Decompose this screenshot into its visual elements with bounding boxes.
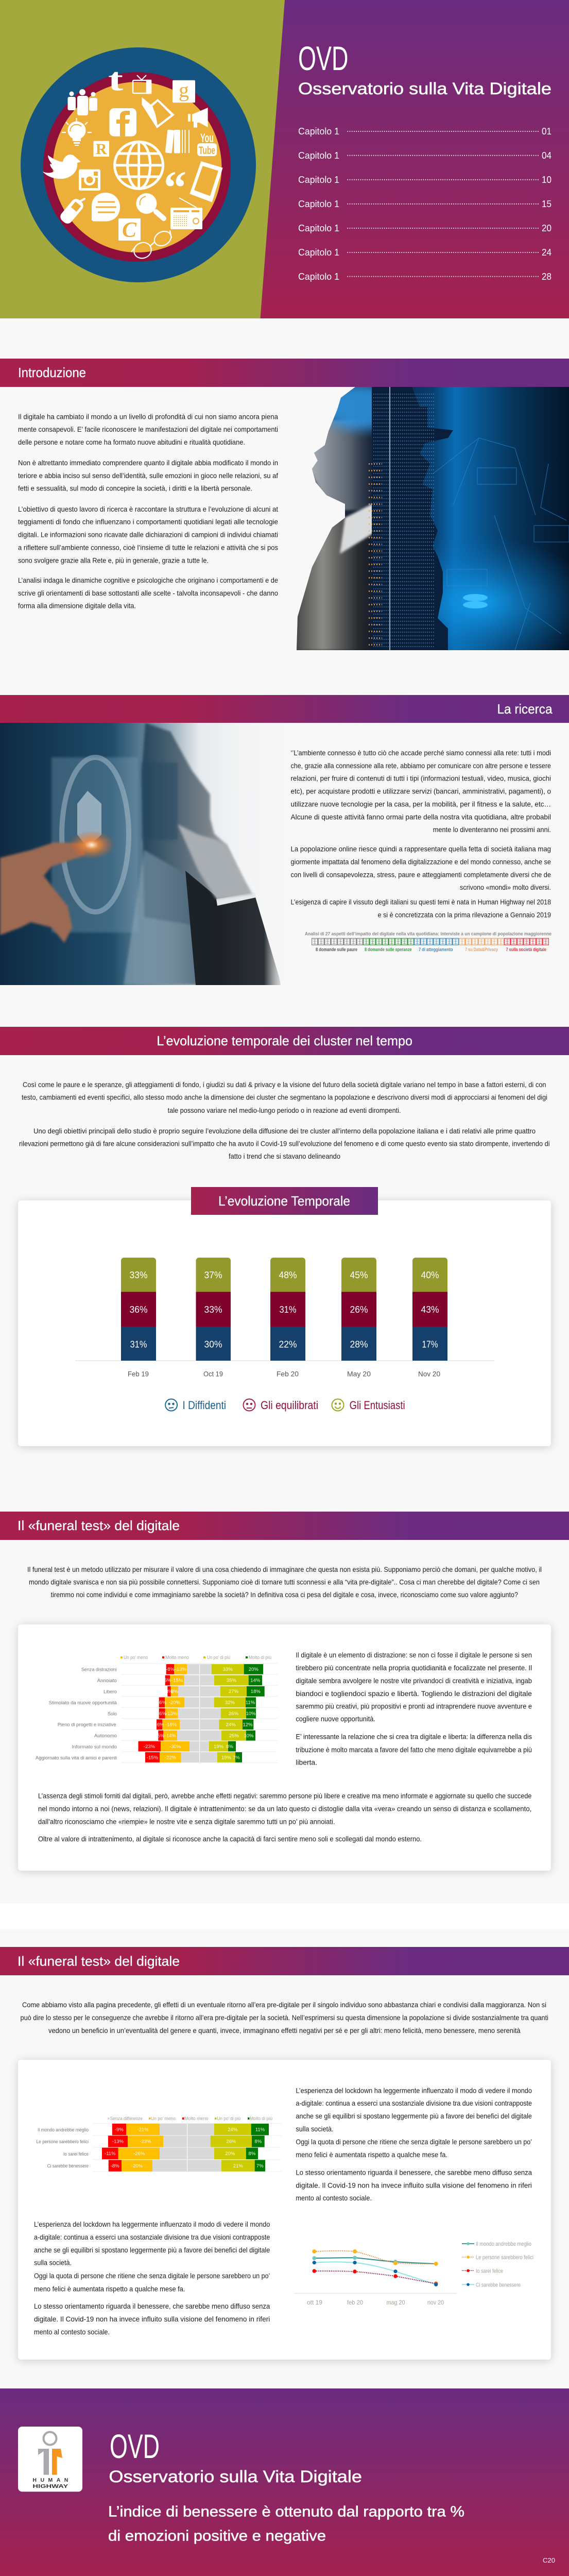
row: Le persone sarebbero felici: -23% (140, 2139, 151, 2144)
icon: enthusiast face (332, 1399, 344, 1411)
bar: Oct 19 (196, 1258, 231, 1378)
photo: man and city double exposure (297, 384, 569, 670)
row: Stimolato da nuove opportunità: Stimolato da nuove opportunità (49, 1700, 117, 1706)
table of contents: 20 (542, 223, 551, 233)
row: Ci sarebbe benessere: 21% (233, 2163, 243, 2169)
row: Solo: -13% (166, 1711, 178, 1717)
row: Le persone sarebbero felici: 8% (254, 2139, 262, 2144)
research text: etc), per acquistare prodotti e utilizzare servizi (bancari, amministrativi, pagamenti), o (290, 787, 551, 795)
row: Aggiornato sulla vita di amici e parenti: 7% (233, 1755, 240, 1761)
header bar (0, 695, 569, 723)
row: Stimolato da nuove opportunità: -6% (158, 1700, 166, 1705)
bar: Nov 20: 43% (421, 1304, 439, 1315)
series: Ci sarebbe benessere (313, 2261, 436, 2284)
right text: Lo stesso orientamento riguarda il benessere, che sarebbe meno diffuso senza (296, 2168, 532, 2177)
row: Stimolato da nuove opportunità: 11% (246, 1700, 255, 1705)
table of contents: Capitolo 1 (298, 150, 339, 161)
diverging bar chart (36, 2116, 281, 2172)
grid labels: 7 su Data&Privacy (465, 947, 498, 952)
row: Libero: 18% (251, 1689, 261, 1694)
row: Libero: 3% (166, 1689, 173, 1694)
row: Stimolato da nuove opportunità: 32% (225, 1700, 235, 1705)
left text: L’esperienza del lockdown ha leggermente influenzato il modo di vedere il mondo (34, 2220, 270, 2228)
icon: leaflet (142, 97, 175, 128)
chart legend: Molto meno (184, 2116, 208, 2122)
right text: sulla società. (296, 2125, 334, 2133)
intro text: teggiamenti di fondo che influenzano i comportamenti quotidiani legati alle tecnologie (18, 518, 278, 526)
research text: utilizzare nuove tecnologie per la casa, per la mobilità, per il fitness e la salute, etc… (290, 800, 551, 808)
row: Ci sarebbe benessere: -8% (111, 2163, 119, 2169)
row: Pieno di progetti e iniziative: Pieno di progetti e iniziative (58, 1722, 116, 1728)
row: Libero: 8% (171, 1689, 178, 1694)
intro text (18, 412, 278, 610)
row: Pieno di progetti e iniziative (58, 1719, 253, 1730)
icon: instagram (79, 170, 100, 191)
line chart legend: Il mondo andrebbe meglio (476, 2241, 531, 2247)
row: Libero: Libero (104, 1689, 117, 1695)
section: funeral test 1 (0, 1512, 569, 1871)
intro text: L’analisi indaga le dinamiche cognitive e psicologiche che originano i comportamenti e de (18, 576, 278, 584)
footer panel (0, 2388, 569, 2576)
x axis labels: mag 20 (386, 2299, 405, 2306)
chart legend: Un po’ meno (151, 2116, 176, 2122)
series: Il mondo andrebbe meglio (312, 2256, 436, 2264)
bar: Feb 19: Feb 19 (128, 1369, 149, 1378)
left text: Lo stesso orientamento riguarda il benessere, che sarebbe meno diffuso senza (34, 2302, 270, 2310)
table of contents: 15 (542, 199, 551, 209)
row: Aggiornato sulla vita di amici e parenti: -15% (147, 1755, 159, 1761)
series: Io sarei felice (312, 2269, 438, 2285)
line chart legend: Le persone sarebbero felici (476, 2255, 533, 2261)
line chart legend: Ci sarebbe benessere (476, 2282, 521, 2288)
table of contents (298, 126, 551, 282)
chart legend: Molto meno (165, 1655, 189, 1660)
row: Aggiornato sulla vita di amici e parenti: Aggiornato sulla vita di amici e parenti (36, 1755, 117, 1761)
intro text: a riflettere sull’ambiente connesso, cioè l’insieme di tutte le relazioni e attività che si pos (18, 543, 278, 551)
row: Libero (104, 1686, 265, 1697)
right text: digitale sembra avvolgere le nostre vite privandoci di creatività e iniziativa, ingab (296, 1676, 532, 1685)
research text: scrivono «mondi» molto diversi. (460, 883, 551, 891)
cover olive background (0, 0, 288, 318)
left text: mento al contesto sociale. (34, 2328, 110, 2336)
row: Senza distrazioni (81, 1664, 263, 1674)
line chart (295, 2241, 533, 2306)
row: Ci sarebbe benessere (47, 2160, 265, 2172)
row: Annoiato (97, 1675, 262, 1685)
row: Stimolato da nuove opportunità: -20% (169, 1700, 181, 1705)
icon: speech bubble (92, 193, 120, 222)
header bar: Il «funeral test» del digitale (18, 1954, 180, 1969)
cover panel (0, 0, 569, 318)
cluster intro text (19, 1080, 550, 1160)
row: Solo: Solo (108, 1711, 117, 1717)
research text (290, 749, 551, 919)
bar: May 20: 45% (350, 1270, 368, 1280)
header bar: L’evoluzione temporale dei cluster nel tempo (157, 1033, 412, 1048)
Human Highway logo (18, 2427, 82, 2492)
row: Il mondo andrebbe meglio: -9% (115, 2127, 124, 2133)
chart legend: Molto di più (250, 2116, 272, 2122)
icon: youtube: You (200, 131, 214, 145)
section: funeral test 2 (0, 1947, 569, 2360)
legend label: I Diffidenti (182, 1399, 226, 1412)
footer statement: di emozioni positive e negative (108, 2528, 326, 2544)
right text: tirebbero più concentrate nella propria quotidianità e focalizzate nel presente. Il (296, 1664, 532, 1672)
table of contents: 28 (542, 272, 551, 282)
row: Io sarei felice: 8% (249, 2151, 256, 2157)
row: Autonomo: Autonomo (94, 1733, 117, 1739)
row: Io sarei felice: -26% (133, 2151, 145, 2157)
left text (34, 2220, 270, 2336)
row: Senza distrazioni: 33% (223, 1667, 233, 1672)
page code: C20 (543, 2556, 555, 2564)
chart title tab (191, 1187, 378, 1215)
row: Annoiato: Annoiato (97, 1678, 117, 1684)
cover subtitle: Osservatorio sulla Vita Digitale (298, 79, 551, 98)
chart legend: Senza differenze (110, 2116, 143, 2122)
cluster intro text: tale possono variare nel medio-lungo periodo o in reazione ad eventi dirompenti. (168, 1106, 401, 1114)
intro text: fetti e sessualità, sul modo di concepire la società, i diritti e la libertà personale. (18, 484, 252, 493)
row: Le persone sarebbero felici: -13% (112, 2139, 124, 2144)
right text: cogliere nuove opportunità. (296, 1715, 375, 1723)
intro text: digitali. Le informazioni sono ricavate dalle dichiarazioni di campioni di individui chiamati (18, 531, 278, 539)
grid labels: 8 domande sulle paure (316, 947, 357, 952)
intro text: Il digitale ha cambiato il mondo a un livello di profondità di cui non siamo ancora piena (18, 412, 278, 420)
icon: bulb (62, 118, 92, 146)
row: Libero: 27% (229, 1689, 239, 1694)
right text (296, 2087, 532, 2202)
row: Solo: 26% (229, 1711, 239, 1717)
question grid graphic (305, 931, 551, 952)
bar: Feb 20: 31% (279, 1304, 297, 1315)
left text: Oggi la quota di persone che ritiene che senza digitale le persone sarebbero un po’ (34, 2272, 270, 2280)
research text: giormente impattata dal fenomeno della digitalizzazione e del mondo connesso, anche se (290, 858, 551, 866)
grid labels (316, 947, 546, 952)
right text (296, 1651, 532, 1767)
lower text: nel mondo intorno a noi (news, relazioni). Il digitale è intrattenimento: se da un lato questo ci distoglie dalla vita «vera» creando un senso di distanza e scollamento, (38, 1805, 531, 1813)
digital icons circle (21, 47, 256, 282)
bar: May 20: May 20 (347, 1369, 371, 1378)
table of contents: Capitolo 1 (298, 247, 339, 258)
row: Pieno di progetti e iniziative: -18% (165, 1722, 177, 1728)
bar: Nov 20: 40% (421, 1270, 439, 1280)
header bar: Introduzione (18, 365, 86, 380)
x axis labels: nov 20 (427, 2299, 444, 2306)
row: Senza distrazioni: -8% (166, 1667, 175, 1672)
cover title OVD: OVD (298, 39, 348, 77)
grid labels: 7 sulla società digitale (506, 947, 546, 952)
research text: Alcune di queste attività fanno ormai parte della nostra vita quotidiana, altre probabil (290, 812, 551, 821)
card: society charts (18, 2060, 551, 2360)
line chart legend: Io sarei felice (476, 2268, 503, 2274)
row: Senza distrazioni: -13% (175, 1667, 186, 1672)
section: introduzione (0, 358, 569, 670)
card: funeral chart (18, 1624, 551, 1871)
Human Highway logo: HUMAN (32, 2477, 68, 2483)
row: Il mondo andrebbe meglio: Il mondo andrebbe meglio (38, 2127, 89, 2133)
question squares (312, 938, 549, 945)
bar: Feb 19 (121, 1258, 156, 1378)
table of contents: 24 (542, 247, 551, 258)
chart legend: Molto di più (249, 1655, 271, 1660)
bar: Feb 19: 33% (130, 1270, 147, 1280)
bar: Oct 19: 30% (204, 1340, 222, 1350)
row: Pieno di progetti e iniziative: 12% (243, 1722, 253, 1728)
icon: people (68, 89, 97, 115)
row: Senza distrazioni: Senza distrazioni (81, 1667, 117, 1672)
icon: mobile phone (58, 197, 85, 226)
icon: tumblr: t (108, 62, 123, 97)
bar: Feb 20 (270, 1258, 305, 1378)
Human Highway logo: HIGHWAY (32, 2483, 68, 2489)
row: Autonomo: -14% (165, 1733, 177, 1739)
row: Io sarei felice: Io sarei felice (63, 2151, 89, 2157)
row: Pieno di progetti e iniziative: 24% (226, 1722, 236, 1728)
right text: L’esperienza del lockdown ha leggermente influenzato il modo di vedere il mondo (296, 2087, 532, 2095)
row: Io sarei felice: -11% (105, 2151, 116, 2157)
row: Autonomo: 10% (244, 1733, 254, 1739)
left text: sulla società. (34, 2259, 72, 2267)
research text: relazioni, per fruire di contenuti di tutti i tipi (informazioni testuali, video, musica, giochi (290, 774, 551, 783)
stacked bar chart (75, 1258, 494, 1378)
footer statement: L’indice di benessere è ottenuto dal rapporto tra % (108, 2504, 464, 2520)
footer OVD: OVD (110, 2427, 160, 2465)
right text: digitale. Il Covid-19 non ha invece influito sulla visione del fenomeno in riferi (296, 2181, 532, 2189)
row: Pieno di progetti e iniziative: -6% (156, 1722, 164, 1728)
footer statement (108, 2504, 464, 2544)
icon: megaphone (188, 108, 208, 128)
intro text: mente consapevoli. E’ facile riconoscere le manifestazioni del digitale nei comportamenti (18, 425, 278, 433)
bar: Oct 19: 37% (204, 1270, 222, 1280)
row: Ci sarebbe benessere: -20% (131, 2163, 143, 2169)
intro text: forma alla dimensione digitale della vita. (18, 602, 136, 610)
right text: E’ interessante la relazione che si crea tra digitale e liberta: la differenza nella dis (296, 1733, 532, 1741)
row: Informato sul mondo: -30% (169, 1744, 181, 1750)
left text: meno felici è aumentata rispetto a qualche mese fa. (34, 2285, 185, 2293)
bar: May 20: 26% (350, 1304, 368, 1315)
row: Il mondo andrebbe meglio: -21% (137, 2127, 149, 2133)
row: Il mondo andrebbe meglio: 11% (255, 2127, 265, 2133)
intro text: sono svolgere grazie alla Rete e, più in generale, grazie a tutte le. (18, 556, 209, 564)
header bar (0, 1027, 569, 1055)
research text: e si è concretizzata con la prima rilevazione a Gennaio 2019 (378, 911, 551, 919)
header bar: La ricerca (497, 701, 553, 717)
row: Autonomo (94, 1731, 255, 1740)
x axis labels (307, 2299, 444, 2306)
icon: R tile: R (96, 141, 107, 158)
icon: globe (115, 142, 163, 189)
row: Annoiato: 35% (227, 1677, 236, 1684)
section: la ricerca (0, 695, 569, 985)
table of contents: 01 (542, 126, 551, 137)
research text: con livelli di consapevolezza, stress, paure e atteggiamenti completamente diversi che de (290, 871, 551, 879)
row: Solo (108, 1708, 256, 1719)
intro text: Non è altrettanto immediato comprendere quanto il digitale abbia modificato il mondo in (18, 459, 278, 467)
legend label: Gli equilibrati (261, 1399, 318, 1412)
intro text: scrive gli orientamenti di base sottostanti alle scelte - talvolta inconsapevoli - che danno (18, 589, 278, 597)
header bar (0, 1512, 569, 1540)
row: Autonomo: 5% (158, 1733, 165, 1739)
bar: Nov 20: Nov 20 (418, 1369, 440, 1378)
bar: Feb 20: Feb 20 (277, 1369, 299, 1378)
header bar (0, 358, 569, 387)
icon: google (173, 78, 195, 103)
cluster intro text: fatto i trend che si stavano delineando (229, 1152, 340, 1160)
row: Le persone sarebbero felici: 26% (226, 2139, 236, 2144)
icon: tv (133, 75, 151, 93)
diverging bar chart (36, 1655, 278, 1762)
icon: youtube: Tube (199, 145, 215, 157)
chart legend: Un po’ di più (217, 2116, 240, 2122)
right text: biandoci e togliendoci spazio e libertà. Togliendo le distrazioni del digitale (296, 1689, 532, 1698)
bar: Oct 19: 33% (204, 1304, 222, 1315)
header bar: Il «funeral test» del digitale (18, 1518, 180, 1533)
bar: Nov 20: 17% (422, 1340, 438, 1350)
row: Io sarei felice: 20% (225, 2151, 235, 2157)
research text: mente lo diventeranno nei prossimi anni. (433, 825, 551, 834)
lower text (38, 1792, 532, 1843)
icon: C tile (118, 218, 141, 242)
icon: youtube (197, 131, 217, 157)
left text: digitale. Il Covid-19 non ha invece influito sulla visione del fenomeno in riferi (34, 2315, 270, 2323)
white band (0, 1903, 569, 1929)
header bar (0, 1947, 569, 1975)
icon: radio (170, 198, 202, 229)
table of contents: 10 (542, 175, 551, 185)
card: evoluzione chart (18, 1187, 551, 1446)
footer subtitle: Osservatorio sulla Vita Digitale (109, 2467, 362, 2486)
row: Aggiornato sulla vita di amici e parenti: -22% (165, 1755, 177, 1761)
row: Il mondo andrebbe meglio (38, 2124, 269, 2135)
row: Informato sul mondo: Informato sul mondo (72, 1744, 117, 1750)
left text: a-digitale: continua a esserci una sostanziale divisione tra due visioni contrapposte (34, 2233, 270, 2241)
row: Informato sul mondo: 8% (226, 1744, 233, 1750)
table of contents: Capitolo 1 (298, 223, 339, 233)
right text: anche se gli equilibri si spostano leggermente più a favore dei benefici del digitale (296, 2112, 532, 2120)
cluster intro text: Uno degli obiettivi principali dello studio è proprio seguire l’evoluzione della diffusione dei tre cluster all’interno della popolazione italiana e i dati relativi alle prime quattro (33, 1127, 536, 1135)
row: Le persone sarebbero felici (36, 2136, 265, 2147)
intro text: delle persone e notare come ha formato nuove abitudini e ritualità quotidiane. (18, 438, 245, 446)
icon: magnifier (136, 193, 164, 218)
circle rings (21, 47, 256, 282)
table of contents: 04 (542, 150, 551, 161)
bar: May 20: 28% (350, 1340, 368, 1350)
row: Senza distrazioni: 20% (249, 1667, 258, 1672)
icon: books (165, 129, 189, 154)
research text: La popolazione online riesce quindi a rappresentare quella fetta di società italiana mag (290, 845, 551, 853)
icon: smartphone (190, 162, 222, 202)
lower text: Oltre al valore di intrattenimento, al digitale si riconosce anche la capacità di farci sentire meno soli e scollegati dal mondo esterno. (38, 1835, 422, 1843)
row: Informato sul mondo: 19% (214, 1744, 224, 1750)
right text: mento al contesto sociale. (296, 2194, 372, 2202)
row: Solo: 10% (246, 1711, 256, 1717)
icon: google: g (179, 78, 189, 101)
intro text: teriore e abbia inciso sul senso dell’identità, sulle emozioni in gioco nelle relazioni, su af (18, 471, 278, 480)
lower text: dall’altro riconosciamo che «riempie» le nostre vite e senza digitale saremmo tutti un po’ più annoiati. (38, 1818, 335, 1826)
right text: tribuzione è molto marcata a favore del fatto che meno digitale equivarrebbe a più (296, 1745, 532, 1754)
row: Io sarei felice (63, 2148, 258, 2159)
society intro text (21, 2001, 548, 2035)
icon: quote marks: “ (164, 161, 186, 214)
legend: clusters (165, 1399, 405, 1412)
intro text: L’obiettivo di questo lavoro di ricerca è raccontare la struttura e l’evoluzione di alcuni at (18, 505, 278, 513)
row: Annoiato: -15% (171, 1677, 183, 1684)
left text: anche se gli equilibri si spostano leggermente più a favore dei benefici del digitale (34, 2246, 270, 2254)
table of contents: Capitolo 1 (298, 175, 339, 185)
row: Autonomo: 25% (229, 1733, 239, 1739)
bar: Oct 19: Oct 19 (203, 1369, 223, 1378)
photo: businessman touching screen (0, 723, 296, 985)
row: Le persone sarebbero felici: Le persone sarebbero felici (36, 2139, 89, 2145)
table of contents: Capitolo 1 (298, 199, 339, 209)
x axis labels: ott 19 (307, 2299, 322, 2306)
table of contents: Capitolo 1 (298, 272, 339, 282)
icon: twitter bird (43, 155, 81, 179)
grid labels: 8 domande sulle speranze (365, 947, 412, 952)
icon: diffident face (165, 1399, 177, 1411)
chart legend (120, 1655, 271, 1660)
section: evoluzione temporale (0, 1027, 569, 1446)
row: Annoiato: 5% (164, 1677, 171, 1684)
right text: a-digitale: continua a esserci una sostanziale divisione tra due visioni contrapposte (296, 2099, 532, 2107)
grid labels: 7 di atteggiamento (419, 947, 453, 952)
row: Annoiato: 14% (250, 1677, 261, 1684)
line chart legend (462, 2241, 533, 2288)
row: Ci sarebbe benessere: 7% (256, 2163, 264, 2169)
icon: leaflet fold (152, 101, 171, 125)
row: Informato sul mondo: -23% (144, 1744, 156, 1750)
society intro text: vedono un beneficio in un’eventualità del genere e quanti, invece, immaginano effetti negativi per sé e per gli altri: meno felicità, meno benessere, meno serenità (48, 2026, 521, 2035)
bar: Feb 20: 22% (279, 1340, 297, 1350)
row: Aggiornato sulla vita di amici e parenti (36, 1752, 242, 1762)
bar: Feb 19: 36% (130, 1304, 147, 1315)
bar: Nov 20 (412, 1258, 447, 1378)
table of contents: Capitolo 1 (298, 126, 339, 137)
icon: C tile: C (122, 218, 137, 242)
right text: liberta. (296, 1758, 317, 1767)
right text: Il digitale è un elemento di distrazione: se non ci fosse il digitale le persone si sen (296, 1651, 532, 1659)
chart legend: Un po’ di più (207, 1655, 230, 1660)
legend label: Gli Entusiasti (350, 1399, 405, 1412)
bar: Feb 19: 31% (130, 1340, 147, 1350)
bar: May 20 (341, 1258, 376, 1378)
row: Aggiornato sulla vita di amici e parenti: 19% (221, 1755, 232, 1761)
chart legend (108, 2116, 272, 2122)
row: Ci sarebbe benessere: Ci sarebbe benessere (47, 2163, 89, 2169)
row: Informato sul mondo (72, 1741, 236, 1751)
icon: facebook (109, 108, 136, 137)
right text: saremmo più creativi, più propositivi e pronti ad intraprendere nuove avventure e (296, 1702, 532, 1710)
icon: balanced face (243, 1399, 255, 1411)
research text: ‘’L’ambiente connesso è tutto ciò che accade perché siamo connessi alla rete: tutti i modi (290, 749, 551, 757)
bar: Feb 20: 48% (279, 1270, 297, 1280)
right text: Oggi la quota di persone che ritiene che senza digitale le persone sarebbero un po’ (296, 2138, 532, 2146)
icon: glasses (131, 229, 174, 261)
chart title tab: L’evoluzione Temporale (218, 1193, 350, 1209)
funeral test intro (27, 1565, 542, 1599)
cover gradient panel (261, 0, 569, 318)
x axis labels: feb 20 (347, 2299, 363, 2306)
funeral test intro: tiremmo noi come individui e come immaginiamo sarebbe la società? In definitiva cosa ci pesa del digitale e cosa, invece, riconosciamo come suo valore aggiunto? (51, 1590, 518, 1599)
row: Solo: -6% (158, 1711, 166, 1717)
row: Stimolato da nuove opportunità (49, 1697, 256, 1707)
right text: meno felici è aumentata rispetto a qualche mese fa. (296, 2150, 447, 2159)
row: Il mondo andrebbe meglio: 24% (228, 2127, 238, 2133)
series: Le persone sarebbero felici (312, 2249, 438, 2266)
chart legend: Un po’ meno (124, 1655, 148, 1660)
